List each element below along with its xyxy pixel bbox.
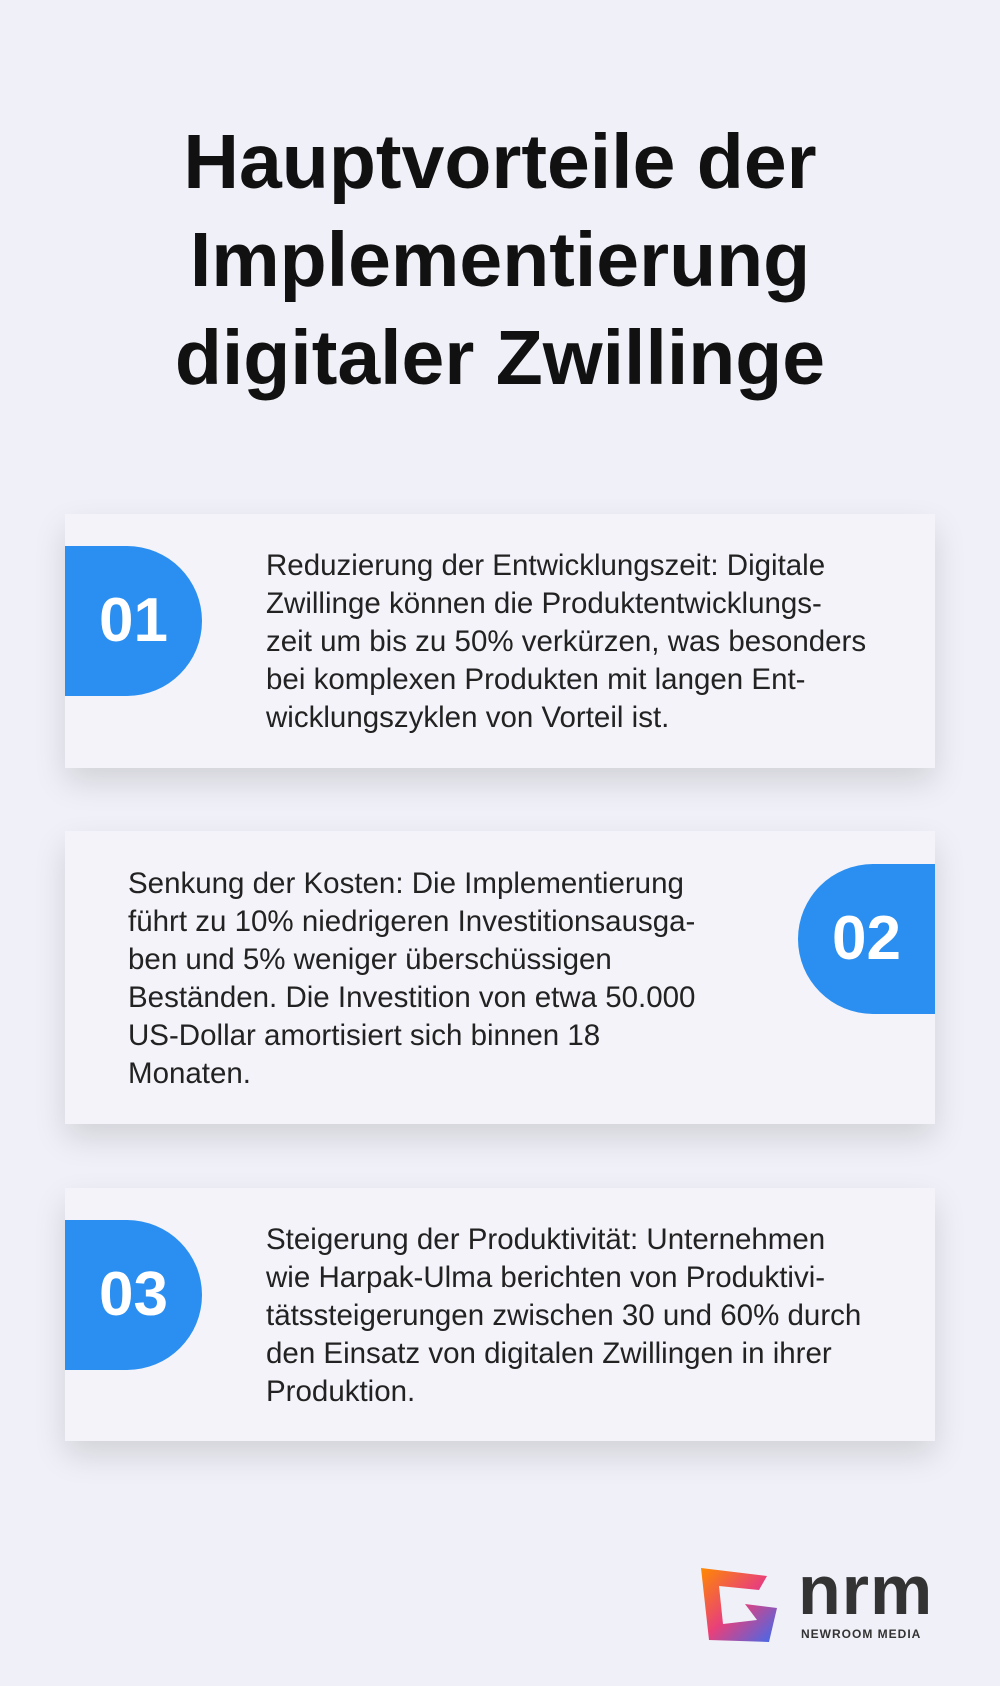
text 2: ben und 5% weniger überschüssigen: [128, 943, 612, 976]
badge 02: 02: [832, 904, 901, 973]
text 3: wie Harpak-Ulma berichten von Produktivi-: [266, 1261, 825, 1294]
title: digitaler Zwillinge: [175, 315, 825, 401]
logo text: nrm: [798, 1551, 933, 1629]
text 2: Beständen. Die Investition von etwa 50.000: [128, 981, 695, 1014]
card 2: [65, 831, 935, 1124]
text 1: Reduzierung der Entwicklungszeit: Digitale: [266, 549, 825, 582]
title: [175, 119, 825, 401]
icon: logo mark: [701, 1568, 777, 1642]
text 3: den Einsatz von digitalen Zwillingen in ihrer: [266, 1337, 832, 1370]
text 3: tätssteigerungen zwischen 30 und 60% durch: [266, 1299, 861, 1332]
text 1: Zwillinge können die Produktentwicklungs-: [266, 587, 822, 620]
text 2: [128, 867, 695, 1090]
badge 01: 01: [99, 586, 168, 655]
text 2: führt zu 10% niedrigeren Investitionsausga-: [128, 905, 695, 938]
logo: [701, 1551, 933, 1642]
card 3: [65, 1188, 935, 1441]
title: Hauptvorteile der: [183, 119, 817, 205]
title: Implementierung: [190, 217, 810, 303]
text 2: Monaten.: [128, 1057, 251, 1090]
badge 03: [65, 1220, 202, 1370]
text 1: [266, 549, 866, 734]
text 2: US-Dollar amortisiert sich binnen 18: [128, 1019, 600, 1052]
text 3: Produktion.: [266, 1375, 415, 1408]
logo: NEWROOM MEDIA: [801, 1627, 921, 1641]
text 2: Senkung der Kosten: Die Implementierung: [128, 867, 684, 900]
badge 03: 03: [99, 1260, 168, 1329]
badge 02: [798, 864, 935, 1014]
badge 01: [65, 546, 202, 696]
text 3: [266, 1223, 861, 1408]
text 3: Steigerung der Produktivität: Unternehmen: [266, 1223, 825, 1256]
card 1: [65, 514, 935, 768]
text 1: bei komplexen Produkten mit langen Ent-: [266, 663, 806, 696]
text 1: zeit um bis zu 50% verkürzen, was besonders: [266, 625, 866, 658]
text 1: wicklungszyklen von Vorteil ist.: [266, 701, 669, 734]
